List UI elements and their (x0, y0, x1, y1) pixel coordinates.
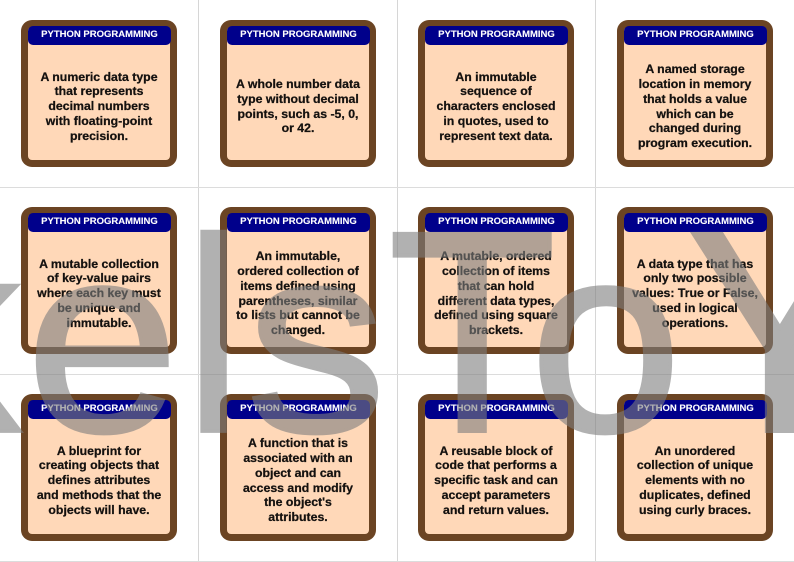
card: method: access and modify (243, 480, 353, 494)
card: boolean: PYTHON PROGRAMMING (637, 216, 754, 227)
card: list: defined using square (434, 308, 558, 322)
card: class: defines attributes (48, 473, 150, 487)
card: boolean: values: True or False, (632, 286, 758, 300)
card: float (21, 20, 177, 167)
card: function: specific task and can (434, 473, 558, 487)
card: method (220, 394, 376, 541)
card: dictionary: of key-value pairs (47, 271, 151, 285)
card: list: brackets. (469, 323, 523, 337)
card: float: with floating-point (46, 114, 152, 128)
card: class: PYTHON PROGRAMMING (41, 403, 158, 414)
card: tuple: ordered collection of (237, 264, 359, 278)
card: string: sequence of (460, 84, 532, 98)
card: class: A blueprint for (57, 444, 141, 458)
card: variable: that holds a value (643, 92, 747, 106)
watermark: T (388, 173, 556, 492)
card: boolean: only two possible (643, 271, 747, 285)
card: tuple: to lists but cannot be (236, 308, 360, 322)
card: set: PYTHON PROGRAMMING (637, 403, 754, 414)
watermark: l (185, 182, 242, 490)
card: tuple (220, 207, 376, 354)
card: string: An immutable (455, 70, 537, 84)
watermark: o (530, 190, 682, 488)
card: method: PYTHON PROGRAMMING (240, 403, 357, 414)
card: set: elements with no (645, 473, 745, 487)
card: string (418, 20, 574, 167)
card: integer: or 42. (282, 121, 314, 135)
card: list: different data types, (438, 294, 554, 308)
card: set (617, 394, 773, 541)
card: function: A reusable block of (440, 444, 552, 458)
card: class: objects will have. (48, 503, 150, 517)
card: variable: location in memory (639, 77, 751, 91)
card: list: collection of items (442, 264, 550, 278)
card: boolean: used in logical (652, 301, 738, 315)
card: float: that represents (55, 84, 143, 98)
card: list: that can hold (458, 279, 534, 293)
watermark: s (246, 190, 386, 489)
card: float: precision. (70, 129, 128, 143)
card: list (418, 207, 574, 354)
card: list: A mutable, ordered (440, 249, 552, 263)
card: dictionary (21, 207, 177, 354)
card: integer: A whole number data (236, 77, 360, 91)
card: set: An unordered (655, 444, 735, 458)
card: variable: PYTHON PROGRAMMING (637, 29, 754, 40)
card: class: and methods that the (37, 488, 161, 502)
card: float: PYTHON PROGRAMMING (41, 29, 158, 40)
watermark: e (26, 188, 179, 488)
card: variable: A named storage (645, 62, 745, 76)
card: integer: points, such as -5, 0, (238, 106, 358, 120)
card: tuple: PYTHON PROGRAMMING (240, 216, 357, 227)
card: variable (617, 20, 773, 167)
card: string: PYTHON PROGRAMMING (438, 29, 555, 40)
card: string: in quotes, used to (443, 114, 549, 128)
card: tuple: items defined using (240, 279, 356, 293)
card: set: collection of unique (637, 458, 753, 472)
card: function: PYTHON PROGRAMMING (438, 403, 555, 414)
card: variable: which can be (656, 106, 734, 120)
card: method: attributes. (268, 510, 328, 524)
card: function: accept parameters (442, 488, 550, 502)
card: string: represent text data. (439, 129, 553, 143)
card: dictionary: PYTHON PROGRAMMING (41, 216, 158, 227)
card: method: A function that is (248, 436, 348, 450)
card: tuple: An immutable, (256, 249, 340, 263)
card: list: PYTHON PROGRAMMING (438, 216, 555, 227)
card: method: the object's (264, 495, 332, 509)
card: class (21, 394, 177, 541)
card: variable: program execution. (638, 136, 752, 150)
card: float: decimal numbers (48, 99, 150, 113)
card: method: object and can (255, 466, 341, 480)
card: dictionary: where each key must (37, 286, 161, 300)
card: integer (220, 20, 376, 167)
card: float: A numeric data type (40, 70, 158, 84)
card: function: and return values. (443, 503, 549, 517)
card: dictionary: be unique and (57, 301, 141, 315)
card: variable: changed during (649, 121, 741, 135)
card: boolean: A data type that has (637, 257, 753, 271)
card: integer: PYTHON PROGRAMMING (240, 29, 357, 40)
card: tuple: changed. (271, 323, 325, 337)
card: function (418, 394, 574, 541)
card: dictionary: immutable. (67, 316, 131, 330)
card: dictionary: A mutable collection (39, 257, 159, 271)
card: set: duplicates, defined (639, 488, 751, 502)
card: class: creating objects that (39, 458, 159, 472)
card: boolean (617, 207, 773, 354)
card: string: characters enclosed (437, 99, 555, 113)
card: integer: type without decimal (237, 92, 359, 106)
card: function: code that performs a (435, 458, 557, 472)
card: tuple: parentheses, similar (239, 294, 357, 308)
card: set: using curly braces. (639, 503, 751, 517)
card: boolean: operations. (662, 316, 728, 330)
card: method: associated with an (243, 451, 353, 465)
